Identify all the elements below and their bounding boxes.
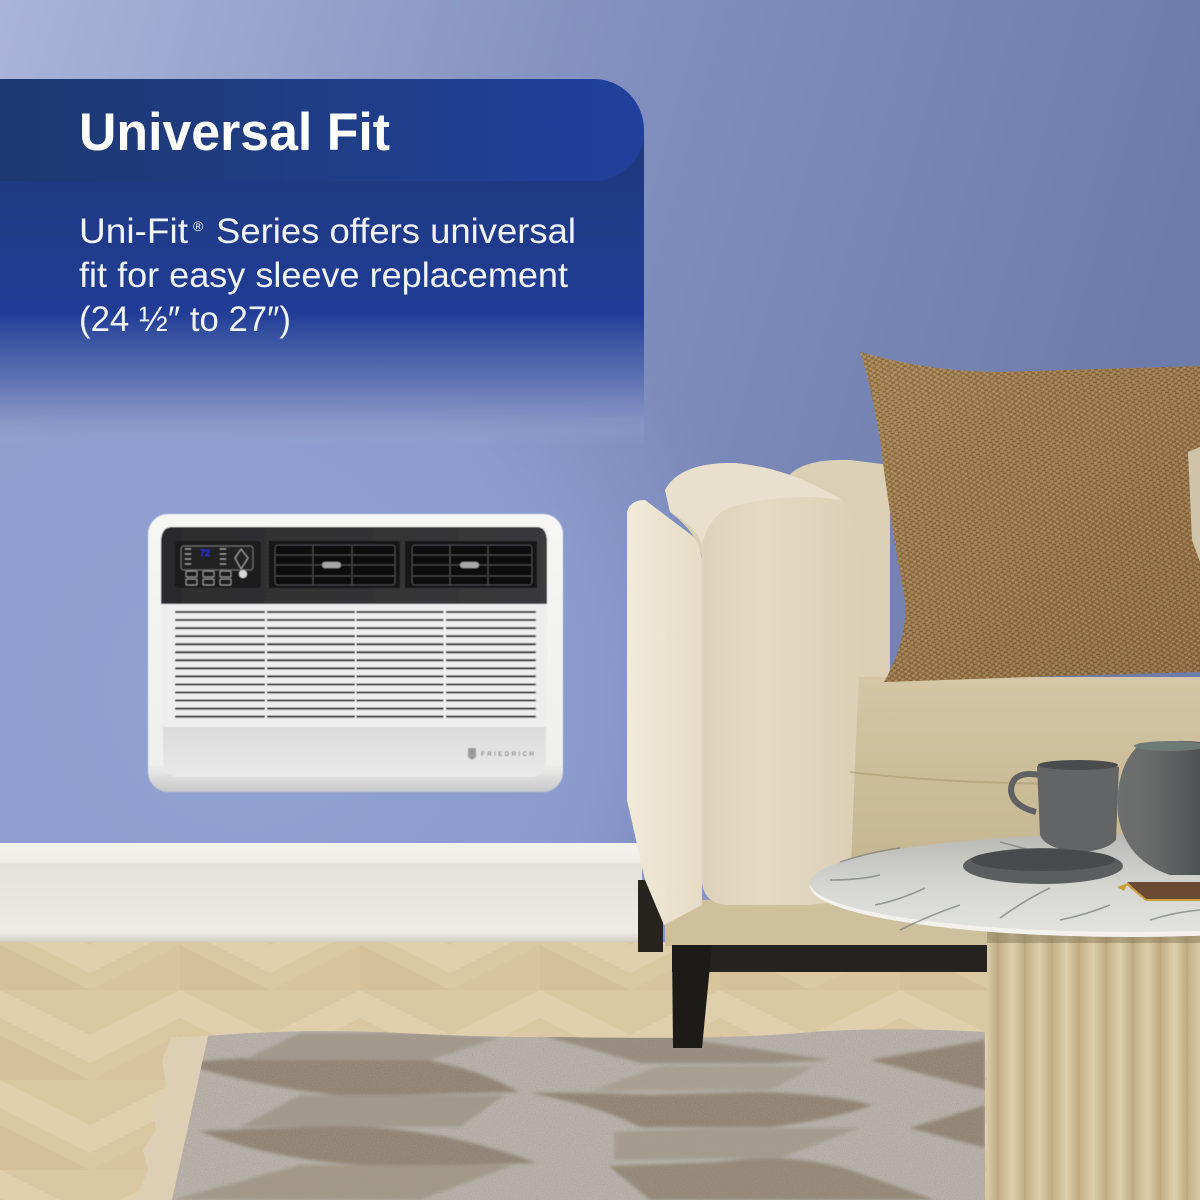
description text: fit for easy sleeve replacement [79, 256, 568, 295]
brown woven pillow [860, 352, 1200, 682]
sofa outer arm [627, 500, 702, 925]
heading: Universal Fit [79, 103, 390, 162]
AC dark top band [161, 527, 547, 604]
panel gradient body [0, 130, 644, 445]
sofa lower rail [665, 900, 1000, 946]
description text: (24 ½″ to 27″) [79, 300, 291, 339]
second pillow sliver [1188, 447, 1200, 562]
AC lower panel [163, 727, 546, 777]
air conditioner unit [148, 514, 563, 792]
temperature display: 72 [200, 548, 210, 558]
sofa back leg [638, 880, 663, 952]
rug texture [130, 1025, 990, 1200]
mug [1011, 760, 1119, 852]
fluted table base [987, 925, 1200, 1200]
sofa seat [845, 677, 1200, 925]
text panel [0, 79, 644, 445]
control panel [175, 541, 261, 588]
sofa black base [672, 945, 987, 972]
sofa [627, 352, 1200, 1048]
rug base [172, 1029, 985, 1200]
coffee table [810, 741, 1200, 1200]
plate [963, 848, 1123, 884]
rug fringe [135, 1036, 208, 1200]
description text: ® [193, 218, 204, 234]
left air vent [269, 541, 400, 588]
right air vent [405, 541, 537, 588]
arm cushion top highlight [665, 463, 842, 545]
sofa front leg [672, 945, 712, 1048]
seat cushion seam [850, 772, 1200, 784]
description text: Uni-Fit [79, 212, 188, 251]
AC sleeve frame [148, 514, 563, 792]
sofa arm cushion [665, 463, 862, 905]
heading bar [0, 79, 644, 181]
rug dark pattern [172, 1033, 985, 1200]
wall background [0, 0, 1200, 860]
description text: Series offers universal [216, 212, 576, 251]
notebook [1117, 882, 1200, 900]
description text [79, 212, 576, 339]
front louvre grille [220, 611, 491, 720]
sofa back [785, 460, 890, 690]
AC white front [161, 600, 547, 730]
marble table top [810, 834, 1200, 937]
rug [130, 1025, 990, 1200]
brand logo [468, 748, 534, 760]
baseboard [0, 843, 642, 942]
brand logo: FRIEDRICH [481, 751, 534, 758]
stone teapot [1118, 741, 1200, 875]
wood herringbone floor [0, 942, 1000, 1200]
